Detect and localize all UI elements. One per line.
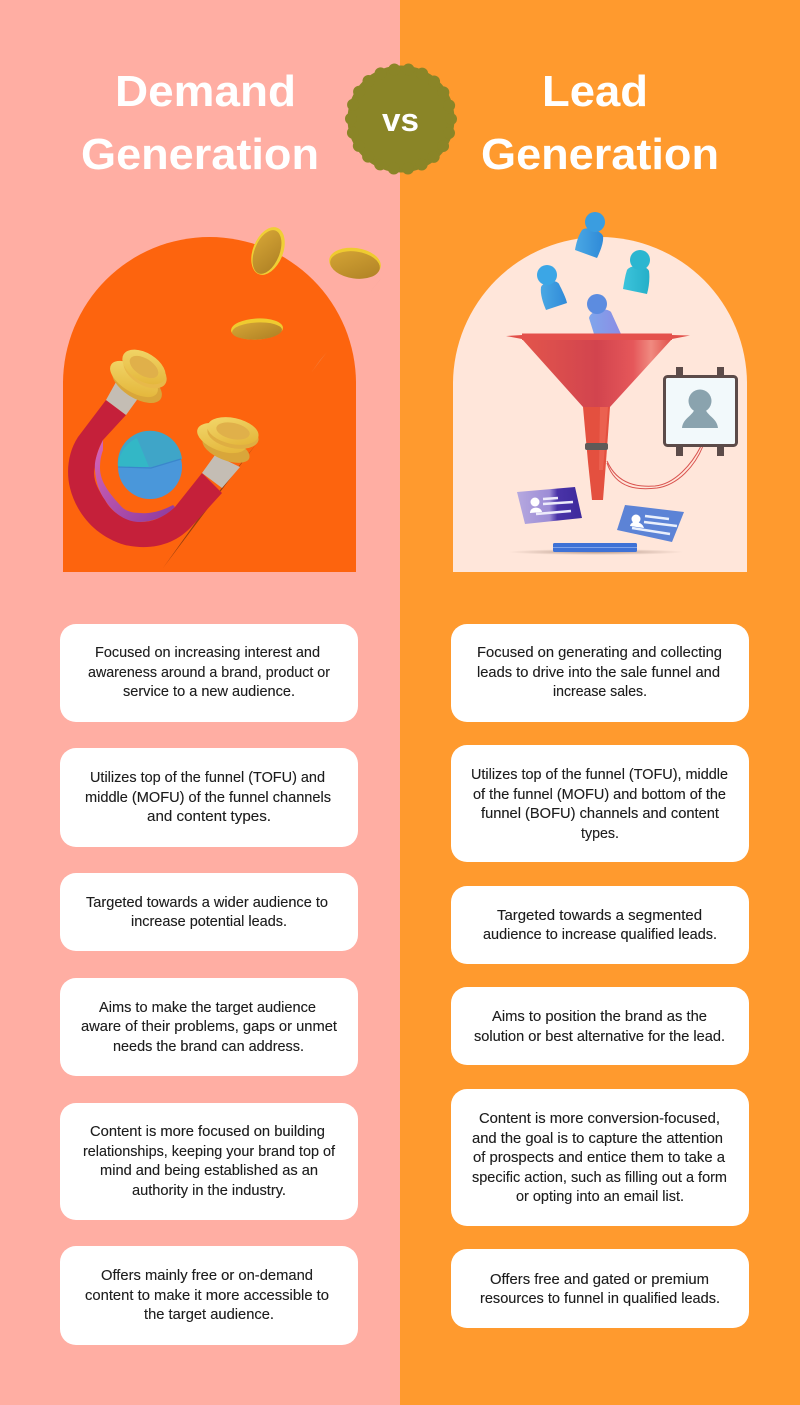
icon: person entering funnel — [587, 294, 621, 334]
heading: Demand Generation — [81, 67, 319, 179]
panel: demand generation comparison cards — [60, 624, 358, 1345]
card: demand focus: Focused on increasing interest and — [95, 645, 320, 661]
card: lead audience: audience to increase qualified leads. — [483, 927, 717, 943]
badge: vs: vs — [382, 102, 419, 138]
card: lead channels: Utilizes top of the funnel (TOFU), middle — [471, 767, 728, 783]
icon: blue contact card — [617, 505, 684, 542]
card: demand content: Content is more focused on building — [90, 1124, 325, 1140]
card: demand channels: middle (MOFU) of the funnel channels — [85, 790, 331, 806]
badge: vs — [348, 66, 454, 172]
card: lead aims: Aims to position the brand as the — [492, 1009, 707, 1025]
card: lead offers: Offers free and gated or premium — [490, 1272, 709, 1288]
card: demand aims: aware of their problems, gaps or unmet — [81, 1019, 337, 1035]
icon: falling person top — [575, 212, 605, 258]
card: lead channels — [451, 745, 749, 862]
card: lead audience — [451, 886, 749, 964]
illustration: lead funnel — [453, 212, 747, 572]
icon: profile board — [664, 367, 736, 456]
icon: wires — [607, 446, 703, 489]
card: lead channels: of the funnel (MOFU) and bottom of the — [473, 787, 726, 803]
card: demand content: mind and being established as an — [100, 1163, 318, 1179]
card: lead focus: Focused on generating and collecting — [477, 645, 722, 661]
card: lead content: or opting into an email list. — [516, 1189, 684, 1205]
card: demand audience: Targeted towards a wider audience to — [86, 895, 328, 911]
panel: lead generation comparison cards — [451, 624, 749, 1328]
card: demand focus: service to a new audience. — [123, 684, 295, 700]
card: demand content — [60, 1103, 358, 1220]
card: demand focus: awareness around a brand, product or — [88, 665, 330, 681]
card: demand aims: needs the brand can address. — [113, 1039, 304, 1055]
icon: flying coin upper — [245, 222, 291, 280]
card: demand focus — [60, 624, 358, 722]
heading: Demand Generation: Generation — [81, 130, 319, 179]
icon: falling person left — [537, 265, 567, 310]
card: lead content: Content is more conversion-focused, — [479, 1111, 720, 1127]
heading: Demand Generation: Demand — [115, 67, 296, 116]
heading: Lead Generation: Lead — [542, 67, 648, 116]
card: lead content: specific action, such as filling out a form — [472, 1170, 727, 1186]
card: lead offers — [451, 1249, 749, 1328]
heading: Lead Generation — [481, 67, 719, 179]
card: demand offers — [60, 1246, 358, 1345]
heading: Lead Generation: Generation — [481, 130, 719, 179]
card: demand channels: and content types. — [147, 809, 271, 825]
card: demand content: relationships, keeping your brand top of — [83, 1144, 336, 1160]
card: lead focus — [451, 624, 749, 722]
icon: purple contact card — [517, 487, 582, 524]
card: demand audience: increase potential leads. — [131, 914, 287, 930]
icon: coin stack on left pole — [104, 342, 173, 411]
icon: pie chart — [118, 431, 182, 499]
icon: magnet — [68, 382, 240, 547]
arch: cream — [453, 237, 747, 572]
icon: flying coin right — [327, 245, 383, 282]
card: lead focus: leads to drive into the sale funnel and — [477, 665, 720, 681]
panel: lead generation background — [400, 0, 800, 1405]
card: demand channels: Utilizes top of the funnel (TOFU) and — [90, 770, 325, 786]
card: lead channels: types. — [581, 826, 619, 842]
card: lead aims — [451, 987, 749, 1065]
card: demand offers: the target audience. — [144, 1307, 274, 1323]
icon: card stack with shadow — [508, 543, 684, 555]
card: demand audience — [60, 873, 358, 951]
arch: orange — [63, 237, 356, 572]
card: lead offers: resources to funnel in qualified leads. — [480, 1291, 720, 1307]
card: demand content: authority in the industry. — [132, 1183, 286, 1199]
icon: falling person right — [623, 250, 650, 294]
icon: funnel — [506, 334, 690, 500]
streak shadow — [163, 443, 257, 568]
card: lead aims: solution or best alternative for the lead. — [474, 1029, 725, 1045]
card: demand offers: Offers mainly free or on-demand — [101, 1268, 313, 1284]
card: demand aims: Aims to make the target audience — [99, 1000, 316, 1016]
icon: coin stack on right pole — [193, 413, 261, 469]
illustration: magnet attracting coins — [63, 222, 390, 572]
card: lead focus: increase sales. — [553, 684, 647, 700]
card: demand aims — [60, 978, 358, 1076]
card: lead content: of prospects and entice them to take a — [473, 1150, 725, 1166]
card: lead content: and the goal is to capture the attention — [472, 1131, 723, 1147]
card: lead audience: Targeted towards a segmented — [497, 908, 702, 924]
card: demand offers: content to make it more accessible to — [85, 1288, 329, 1304]
card: demand channels — [60, 748, 358, 847]
card: lead content — [451, 1089, 749, 1226]
card: lead channels: funnel (BOFU) channels and content — [481, 806, 719, 822]
icon: flying coin middle — [230, 317, 284, 341]
panel: demand generation background — [0, 0, 400, 1405]
